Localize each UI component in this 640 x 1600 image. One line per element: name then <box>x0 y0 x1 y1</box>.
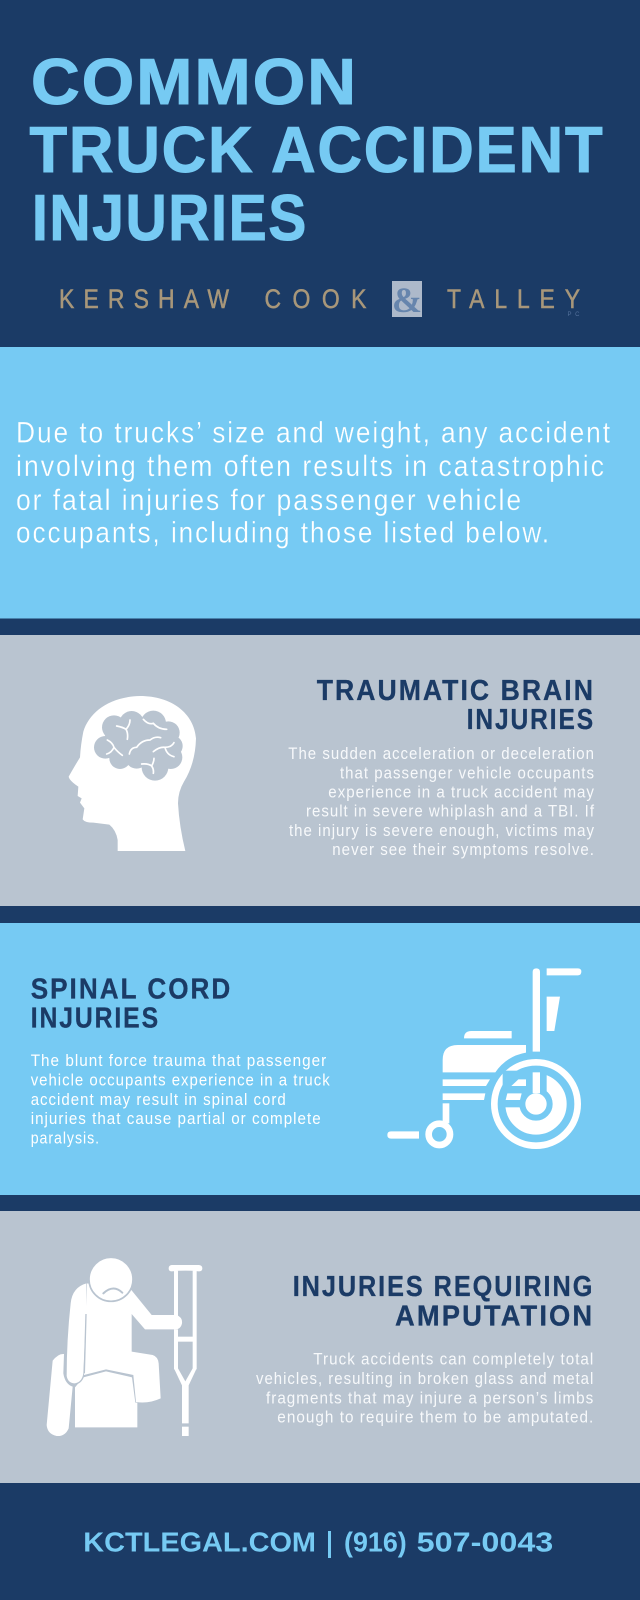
heading: INJURIES <box>31 1003 160 1035</box>
intro text <box>16 417 612 550</box>
body text: never see their symptoms resolve. <box>332 841 595 859</box>
panel: traumatic brain injuries <box>0 635 640 906</box>
body text: experience in a truck accident may <box>328 783 595 801</box>
body text: injuries that cause partial or complete <box>31 1110 322 1128</box>
logo: Kershaw Cook Talley: PC <box>568 312 580 318</box>
heading: TRAUMATIC BRAIN <box>317 675 595 707</box>
heading <box>293 1271 594 1332</box>
title: TRUCK ACCIDENT <box>30 113 604 186</box>
body text: Truck accidents can completely total <box>313 1350 594 1368</box>
logo: Kershaw Cook Talley: & <box>392 280 422 320</box>
logo: Kershaw Cook Talley: KERSHAW <box>59 284 229 314</box>
body text: accident may result in spinal cord <box>31 1091 287 1109</box>
body text: The blunt force trauma that passenger <box>31 1052 327 1070</box>
panel: injuries requiring amputation <box>0 1211 640 1483</box>
panel: spinal cord injuries <box>0 923 640 1195</box>
title: COMMON <box>31 45 358 118</box>
footer: contact: (916) <box>344 1527 407 1558</box>
body text: that passenger vehicle occupants <box>340 764 595 782</box>
icon: seated amputee with crutch <box>47 1257 202 1436</box>
footer: contact: 507-0043 <box>417 1527 553 1558</box>
title <box>30 45 604 254</box>
footer: contact <box>0 1483 640 1600</box>
logo: Kershaw Cook Talley: COOK <box>264 284 367 314</box>
body text <box>256 1350 594 1426</box>
body text: enough to require them to be amputated. <box>277 1408 594 1426</box>
body text: result in severe whiplash and a TBI. If <box>306 803 595 821</box>
heading: INJURIES <box>467 704 595 736</box>
logo: Kershaw Cook Talley: TALLEY <box>447 284 580 314</box>
intro text: occupants, including those listed below. <box>16 517 551 550</box>
body text: paralysis. <box>31 1129 100 1147</box>
intro text: or fatal injuries for passenger vehicle <box>16 484 523 517</box>
panel: introduction <box>0 347 640 618</box>
panel: header <box>0 0 640 347</box>
body text <box>31 1052 331 1147</box>
body text: fragments that may injure a person’s limbs <box>266 1389 594 1407</box>
icon: wheelchair <box>387 968 581 1146</box>
title: INJURIES <box>32 181 308 254</box>
icon: head with brain <box>69 696 196 851</box>
heading: AMPUTATION <box>395 1300 594 1332</box>
footer: contact: KCTLEGAL.COM <box>83 1527 316 1558</box>
body text: vehicle occupants experience in a truck <box>31 1072 331 1090</box>
body text: the injury is severe enough, victims may <box>289 822 595 840</box>
body text <box>288 745 595 859</box>
body text: The sudden acceleration or deceleration <box>288 745 595 763</box>
heading: SPINAL CORD <box>31 973 232 1005</box>
logo: Kershaw Cook Talley <box>59 280 580 320</box>
heading: INJURIES REQUIRING <box>293 1271 594 1303</box>
heading <box>31 973 232 1035</box>
heading <box>317 675 595 736</box>
body text: vehicles, resulting in broken glass and metal <box>256 1370 594 1388</box>
